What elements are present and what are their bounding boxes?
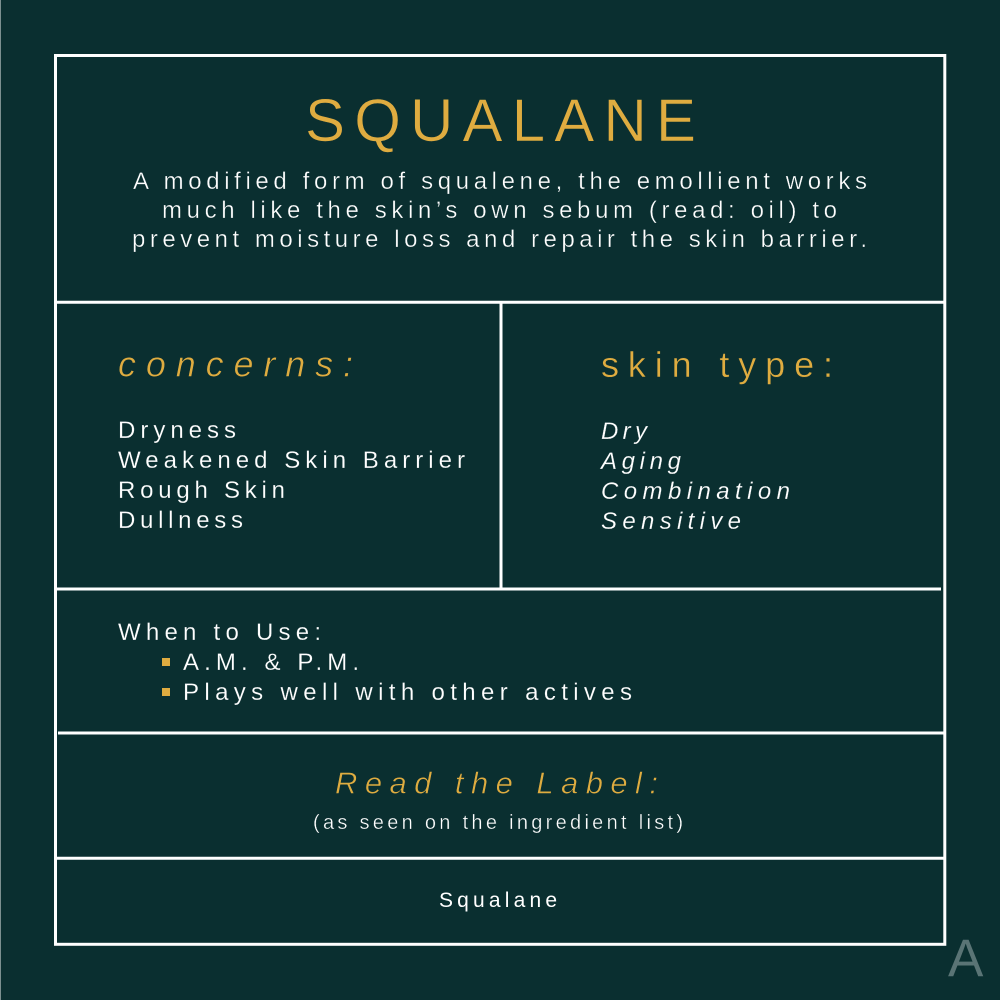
concerns list: Dullness	[118, 507, 243, 534]
title: SQUALANE	[305, 87, 696, 154]
panel: when to use	[118, 619, 632, 706]
concerns list: Weakened Skin Barrier	[118, 447, 465, 474]
read the label heading: Read the Label:	[335, 766, 658, 800]
read the label note: (as seen on the ingredient list)	[313, 812, 683, 834]
concerns list: Dryness	[118, 417, 236, 444]
logo mark: A	[948, 929, 984, 988]
concerns list: Rough Skin	[118, 477, 285, 504]
ingredient name: Squalane	[439, 889, 557, 912]
panel: read the label	[313, 766, 683, 834]
bullet: plays well: Plays well with other actives	[183, 679, 632, 706]
skin type list: Sensitive	[601, 508, 741, 535]
intro text: much like the skin’s own sebum (read: oil) to	[162, 197, 837, 224]
skin type heading: skin type:	[601, 344, 833, 385]
skin type list: Aging	[599, 448, 682, 475]
panel: concerns	[118, 344, 465, 534]
panel: skin type	[599, 344, 833, 535]
panel frame and grid	[56, 56, 945, 944]
when to use heading: When to Use:	[118, 619, 321, 646]
intro text: A modified form of squalene, the emollient works	[133, 168, 867, 195]
concerns heading: concerns:	[118, 344, 353, 384]
bullet: A.M. and P.M.: A.M. & P.M.	[183, 649, 359, 676]
skin type list: Combination	[601, 478, 790, 505]
skin type list	[599, 418, 790, 535]
intro text	[132, 168, 867, 253]
intro text: prevent moisture loss and repair the skin barrier.	[132, 226, 867, 253]
skin type list: Dry	[601, 418, 649, 445]
concerns list	[118, 417, 465, 534]
